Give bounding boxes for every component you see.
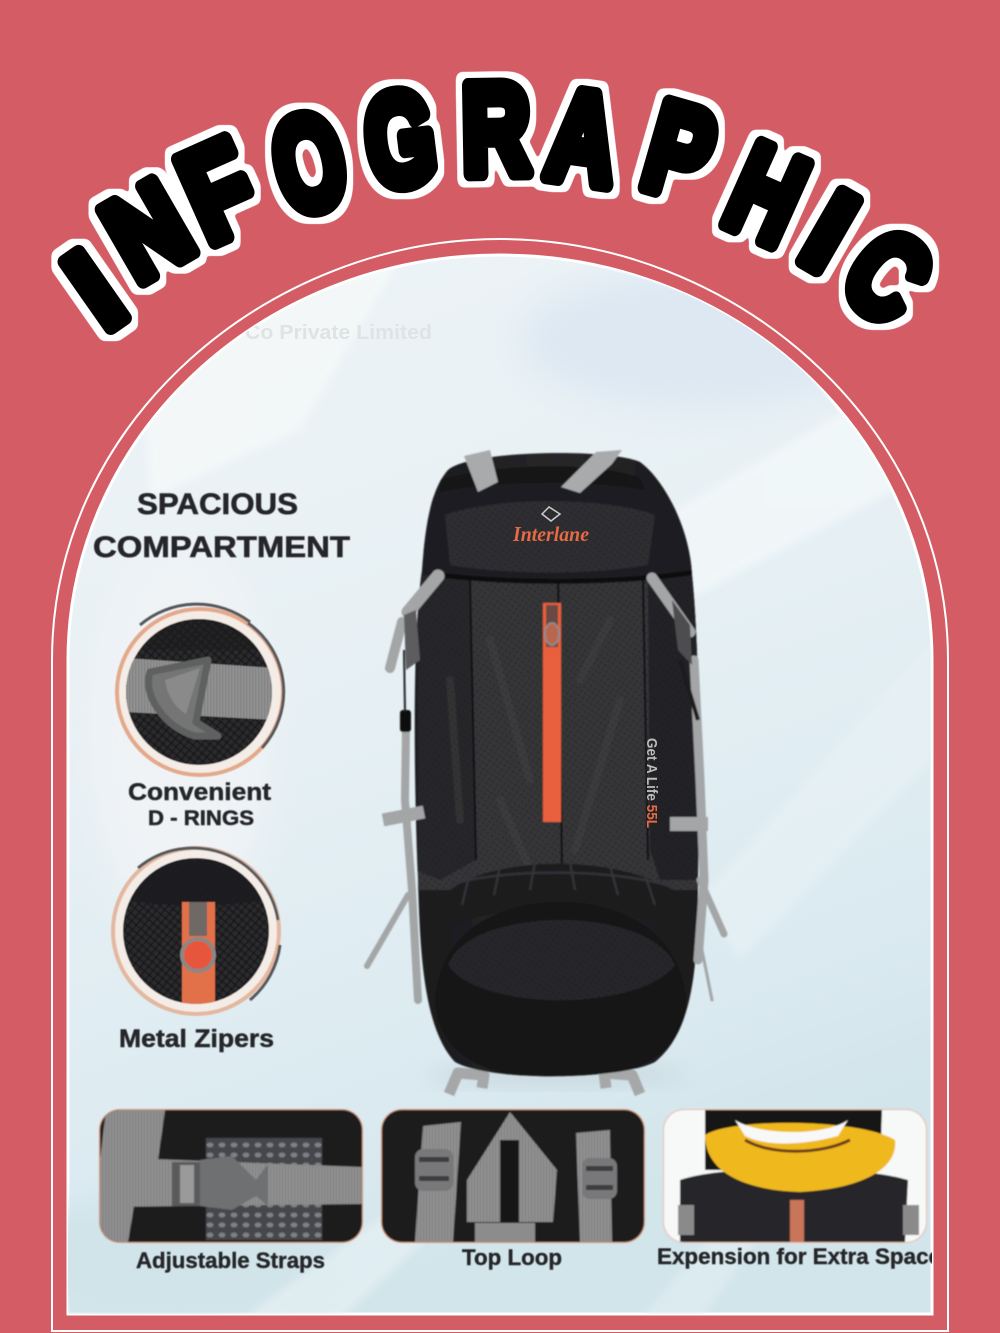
title: N [83,156,213,307]
body [415,453,699,1076]
title: F [160,111,277,270]
front pocket [447,908,682,1078]
pocket band [451,864,672,909]
side straps and tails [367,576,724,1000]
panel: adjustable straps [99,1109,363,1243]
label: convenient d-rings [128,779,271,830]
title: R [461,57,531,201]
label: convenient d-rings: Convenient [128,779,271,806]
label: convenient d-rings: D - RINGS [148,807,254,830]
outer arch outline [52,239,948,1331]
cord stopper [400,710,411,732]
heading: spacious compartment: SPACIOUS [137,488,298,521]
title [44,57,955,353]
label: metal zipers: Metal Zipers [119,1025,274,1053]
icon: d-ring circle [117,604,284,775]
title: G [357,62,443,216]
model label: Get A Life 55L [643,738,660,828]
logo mark [542,507,560,521]
mesh body panels [418,575,698,890]
title: I [783,166,876,296]
watermark: Co Private Limited [245,322,432,344]
label: adjustable straps: Adjustable Straps [136,1248,325,1273]
label: expension for extra space: Expension for Extra Space [657,1244,941,1269]
title: C [820,202,955,349]
brand logo: Interlane [512,522,589,546]
lid [423,483,692,580]
panel: expansion [663,1109,927,1243]
title: H [707,117,825,273]
title: I [44,227,145,353]
heading: spacious compartment: COMPARTMENT [93,531,350,564]
icon: metal zipper circle [113,848,280,1014]
title: O [259,83,359,243]
heading: spacious compartment [93,488,350,564]
top straps [464,450,622,493]
panel: top loop [381,1109,645,1243]
title: P [630,74,729,228]
orange zipper [543,603,561,822]
panel: arched photo area [0,255,932,1320]
title: A [539,62,626,212]
backpack photo [367,450,724,1094]
label: top loop: Top Loop [462,1245,562,1270]
bottom handles [449,1073,640,1094]
side buckles [404,610,420,670]
